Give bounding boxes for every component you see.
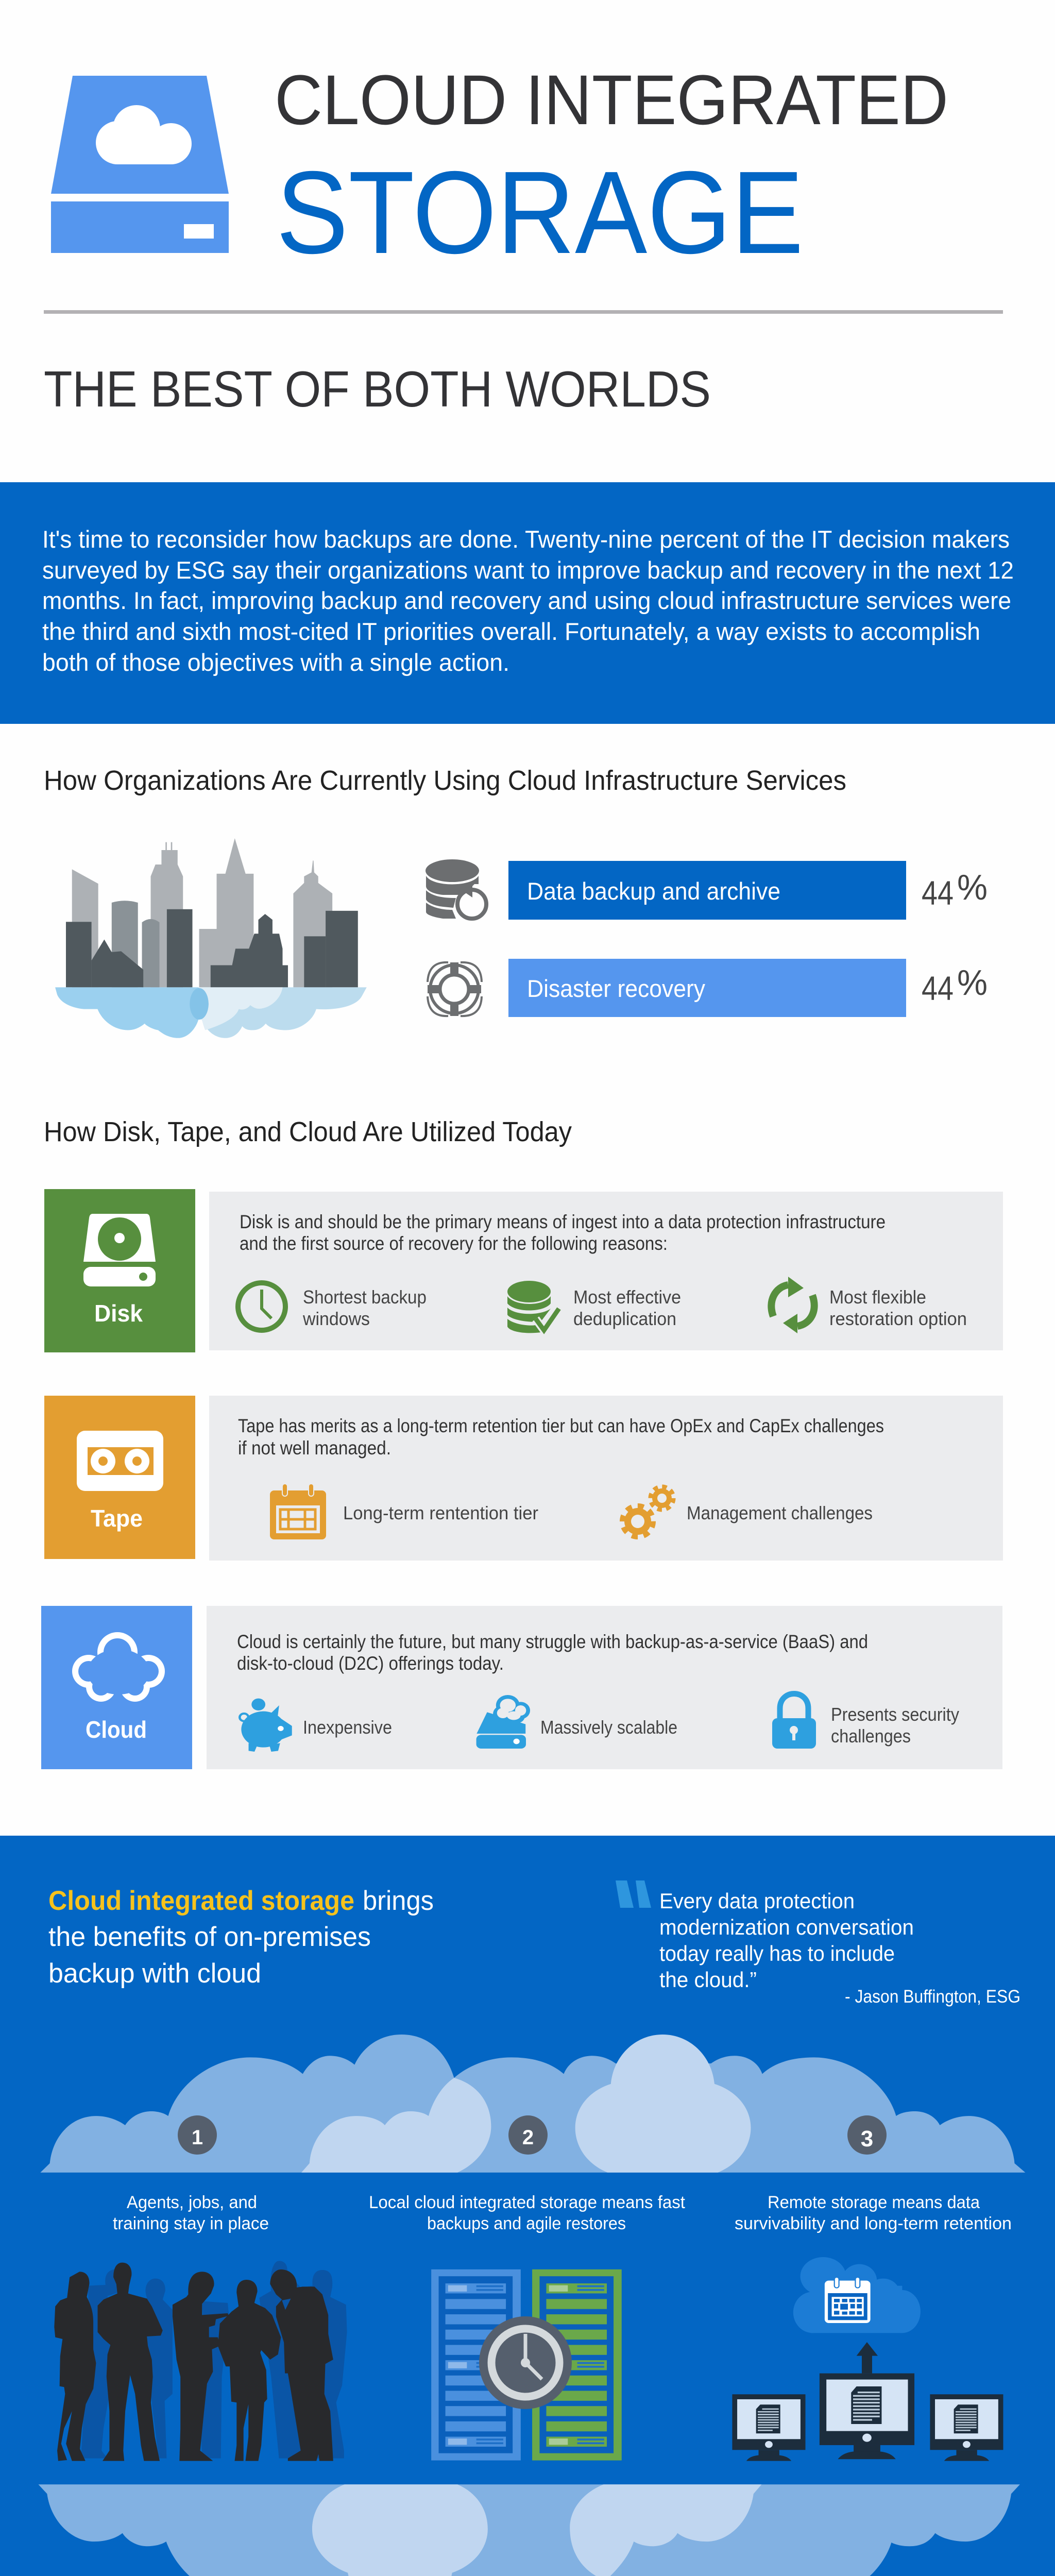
- disk description: Disk is and should be the primary means of ingest into a data protection infrastructure: [240, 1211, 886, 1232]
- arrow up: [857, 2342, 878, 2374]
- headline: Cloud integrated storage: [48, 1886, 354, 1916]
- tape description: if not well managed.: [238, 1437, 391, 1459]
- value: 44 percent: %: [957, 962, 988, 1003]
- tile: tape: [44, 1396, 195, 1559]
- panel: cloud integrated storage band: [0, 1836, 1055, 2576]
- illustration: bottom clouds: [38, 2484, 1020, 2576]
- monitor: right: [930, 2394, 1003, 2461]
- disk description: and the first source of recovery for the following reasons:: [240, 1233, 668, 1254]
- step 1 number: [178, 2115, 217, 2155]
- panel: disk: [44, 1189, 1003, 1352]
- illustration: server racks with clock: [431, 2269, 622, 2461]
- icon: lifebuoy: [428, 962, 482, 1016]
- bar: data backup and archive: [508, 861, 906, 920]
- tile: disk: Disk: [94, 1300, 143, 1327]
- reason: shortest backup windows: [302, 1286, 427, 1329]
- step 1 caption: [113, 2193, 269, 2233]
- icon: calendar: [270, 1484, 326, 1539]
- step 2 number: [508, 2115, 548, 2155]
- step 3 number: 3: [861, 2126, 873, 2151]
- step 3 caption: Remote storage means data: [768, 2193, 980, 2212]
- cloud description: Cloud is certainly the future, but many struggle with backup-as-a-service (BaaS) and: [237, 1631, 868, 1652]
- intro paragraph: It's time to reconsider how backups are done. Twenty-nine percent of the IT decision makers: [42, 526, 1010, 553]
- step 2 number: 2: [522, 2126, 534, 2149]
- header: storage drive icon: [51, 76, 229, 253]
- step 3 number: [847, 2115, 887, 2155]
- step 2 caption: [369, 2193, 686, 2233]
- reason: long-term retention tier: Long-term rentention tier: [343, 1502, 538, 1523]
- intro band: [0, 482, 1055, 724]
- quote: Every data protection: [659, 1889, 855, 1913]
- reason: most effective deduplication: Most effective: [573, 1286, 681, 1308]
- bar: disaster recovery: Disaster recovery: [527, 975, 705, 1002]
- reason: most effective deduplication: deduplication: [573, 1308, 676, 1329]
- value: 44 percent: 44: [922, 969, 954, 1007]
- step 3 caption: survivability and long-term retention: [735, 2214, 1012, 2233]
- intro paragraph: both of those objectives with a single action.: [42, 649, 509, 676]
- icon: clock: [238, 1283, 285, 1330]
- icon: piggy bank: [240, 1699, 292, 1752]
- reason: presents security challenges: Presents security: [831, 1704, 959, 1725]
- quote: - Jason Buffington, ESG: [845, 1987, 1020, 2007]
- panel: cloud: [41, 1606, 1002, 1769]
- rack: blue: [431, 2269, 521, 2461]
- intro paragraph: months. In fact, improving backup and recovery and using cloud infrastructure services were: [42, 587, 1011, 614]
- intro paragraph: surveyed by ESG say their organizations want to improve backup and recovery in the next 12: [42, 556, 1014, 584]
- heading: current use: How Organizations Are Currently Using Cloud Infrastructure Services: [44, 765, 846, 796]
- step 1 number: 1: [192, 2126, 203, 2149]
- step 3 caption: [735, 2193, 1012, 2233]
- quote: [659, 1889, 1020, 2007]
- reason: most flexible restoration option: Most flexible: [829, 1286, 926, 1308]
- reason: most effective deduplication: [573, 1286, 681, 1329]
- quote: today really has to include: [659, 1941, 895, 1965]
- value: 44 percent: [922, 867, 988, 912]
- icon: refresh: [771, 1277, 814, 1333]
- heading: disk tape cloud: How Disk, Tape, and Cloud Are Utilized Today: [44, 1116, 572, 1147]
- step 2 caption: backups and agile restores: [427, 2214, 626, 2233]
- tile: tape: Tape: [91, 1505, 143, 1532]
- icon: padlock: [772, 1694, 816, 1749]
- tape description: Tape has merits as a long-term retention tier but can have OpEx and CapEx challenges: [238, 1415, 884, 1436]
- step 2 caption: Local cloud integrated storage means fast: [369, 2193, 686, 2212]
- illustration: people silhouettes: [54, 2261, 347, 2461]
- quote: modernization conversation: [659, 1915, 914, 1939]
- reason: most flexible restoration option: [829, 1286, 967, 1329]
- reason: management challenges: Management challenges: [687, 1502, 873, 1523]
- intro paragraph: [42, 526, 1014, 676]
- step 1 caption: Agents, jobs, and: [127, 2193, 257, 2212]
- icon: database check: [507, 1281, 559, 1333]
- title: STORAGE: [276, 147, 804, 278]
- step 1 caption: training stay in place: [113, 2214, 269, 2233]
- illustration: top clouds: [40, 2035, 1025, 2173]
- reason: massively scalable: Massively scalable: [540, 1717, 677, 1738]
- tile: cloud: [41, 1606, 192, 1769]
- value: 44 percent: 44: [922, 874, 954, 912]
- monitor: center: [820, 2374, 914, 2459]
- cloud with calendar: [793, 2257, 921, 2333]
- icon: database restore: [426, 859, 486, 919]
- illustration: desktops sending to cloud: [732, 2257, 1003, 2461]
- headline: the benefits of on-premises: [48, 1922, 371, 1952]
- tape description: [238, 1415, 884, 1459]
- quote: the cloud.”: [659, 1968, 757, 1992]
- headline: backup with cloud: [48, 1958, 261, 1989]
- monitor: left: [732, 2394, 805, 2461]
- headline: brings: [363, 1886, 434, 1916]
- reason: presents security challenges: [831, 1704, 959, 1747]
- bar: data backup and archive: Data backup and archive: [527, 877, 780, 905]
- reason: inexpensive: Inexpensive: [303, 1717, 392, 1738]
- subtitle: THE BEST OF BOTH WORLDS: [44, 361, 711, 417]
- panel: tape: [44, 1396, 1003, 1561]
- intro paragraph: the third and sixth most-cited IT priorities overall. Fortunately, a way exists to accomplish: [42, 618, 980, 645]
- reason: most flexible restoration option: restoration option: [829, 1308, 967, 1329]
- value: 44 percent: %: [957, 867, 988, 907]
- value: 44 percent: [922, 962, 988, 1007]
- icon: clock: [479, 2316, 572, 2409]
- illustration: city on cloud: [55, 838, 367, 1038]
- tile: disk: [44, 1189, 195, 1352]
- title: CLOUD INTEGRATED: [275, 61, 948, 140]
- bar: disaster recovery: [508, 959, 906, 1017]
- reason: presents security challenges: challenges: [831, 1725, 911, 1747]
- quote mark: [616, 1880, 651, 1908]
- headline: [48, 1886, 434, 1989]
- icon: drive with cloud: [477, 1695, 530, 1749]
- cloud description: disk-to-cloud (D2C) offerings today.: [237, 1653, 504, 1674]
- icon: gears: [622, 1487, 673, 1537]
- cloud description: [237, 1631, 868, 1674]
- title: [275, 61, 948, 278]
- disk description: [240, 1211, 886, 1254]
- reason: shortest backup windows: Shortest backup: [303, 1286, 427, 1308]
- reason: shortest backup windows: windows: [302, 1308, 370, 1329]
- rack: green: [532, 2269, 622, 2461]
- tile: cloud: Cloud: [86, 1716, 147, 1743]
